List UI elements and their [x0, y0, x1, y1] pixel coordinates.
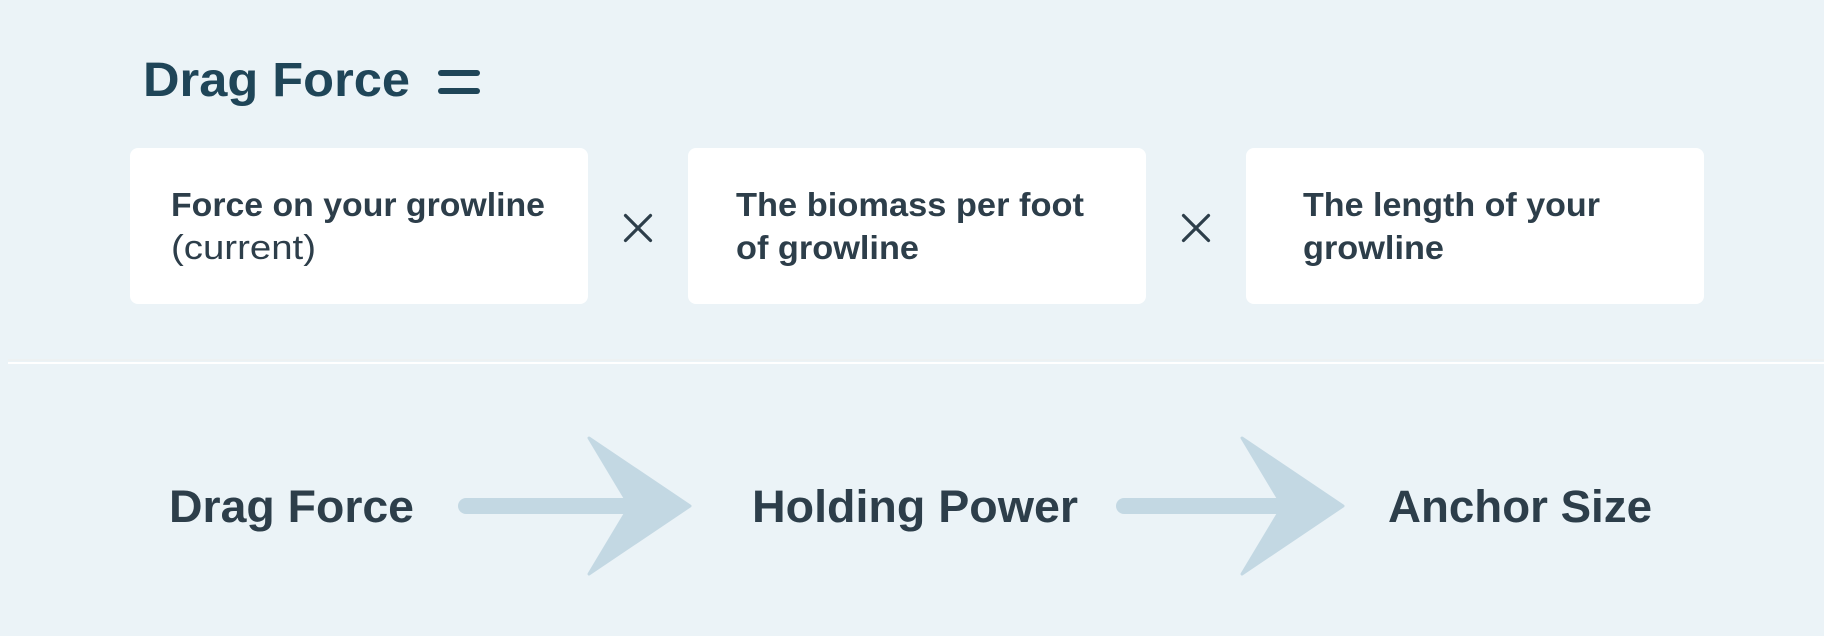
arrow 2 — [1116, 438, 1343, 574]
card text: length of growline: growline — [1303, 229, 1444, 266]
icon: multiply sign 2 — [1184, 216, 1208, 240]
card text: length of growline — [1303, 186, 1600, 266]
card text: force on your growline (current) — [171, 186, 545, 267]
label: holding power: Holding Power — [752, 481, 1078, 532]
panel: biomass per foot — [688, 148, 1146, 304]
card text: biomass per foot of growline: The biomass per foot — [736, 186, 1084, 223]
heading text: Drag Force — [143, 54, 410, 107]
icon: equals sign — [438, 70, 480, 94]
label: anchor size: Anchor Size — [1388, 481, 1652, 532]
panel: length of growline — [1246, 148, 1704, 304]
card text: force on your growline (current): (current) — [171, 229, 316, 267]
icon: multiply sign 1 — [626, 216, 650, 240]
panel: force on your growline — [130, 148, 588, 304]
label: drag force: Drag Force — [169, 481, 414, 532]
card text: biomass per foot of growline: of growline — [736, 229, 919, 266]
arrow 1 — [458, 438, 690, 574]
card text: force on your growline (current): Force on your growline — [171, 186, 545, 223]
card text: biomass per foot of growline — [736, 186, 1084, 266]
card text: length of growline: The length of your — [1303, 186, 1600, 223]
heading: Drag Force equals — [143, 54, 480, 107]
